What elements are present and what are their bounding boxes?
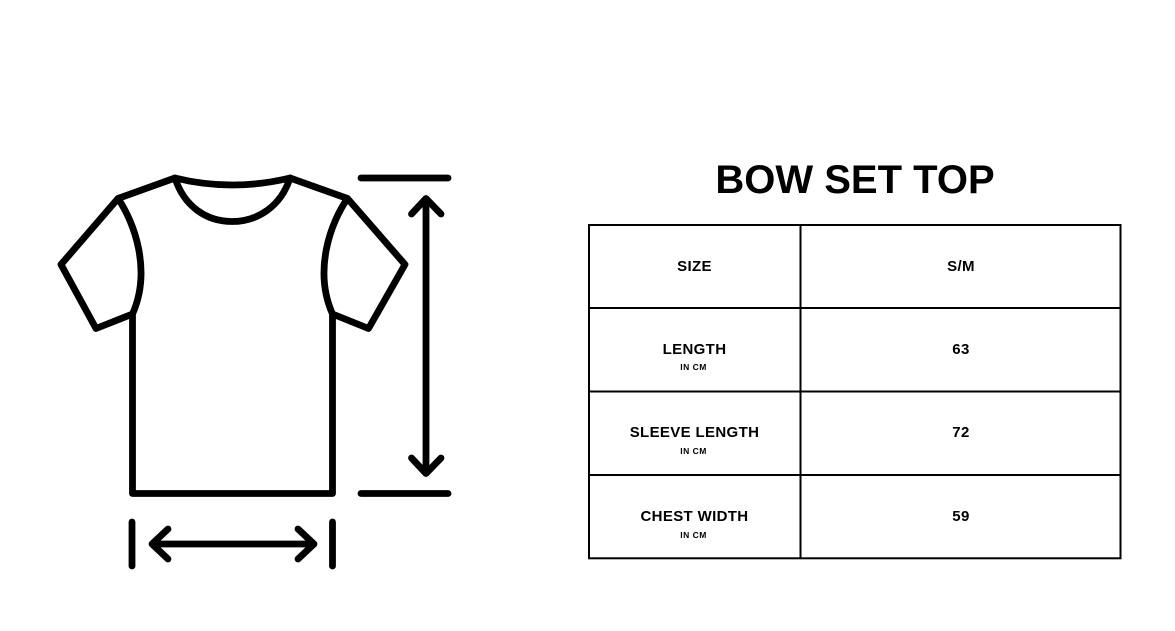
row: sleeve length: IN CM: [680, 446, 707, 456]
row: size: [677, 258, 975, 275]
row: chest width: CHEST WIDTH: [640, 508, 748, 525]
row: chest width: 59: [952, 508, 970, 525]
height measurement arrow: [361, 178, 448, 494]
row: sleeve length: 72: [952, 424, 970, 441]
width measurement arrow: [132, 522, 332, 566]
icon: t-shirt with measurement arrows: [58, 174, 452, 570]
t-shirt outline: [61, 178, 405, 494]
title: BOW SET TOP: [715, 158, 995, 202]
row: length: IN CM: [680, 362, 707, 372]
row: length: [663, 341, 970, 372]
row: chest width: [640, 508, 970, 540]
row: size: SIZE: [677, 258, 712, 275]
row: sleeve length: [630, 424, 970, 456]
row: length: 63: [952, 341, 970, 358]
row: length: LENGTH: [663, 341, 726, 358]
row: chest width: IN CM: [680, 530, 707, 540]
row: sleeve length: SLEEVE LENGTH: [630, 424, 759, 441]
size table: [588, 224, 1122, 560]
row: size: S/M: [947, 258, 975, 275]
